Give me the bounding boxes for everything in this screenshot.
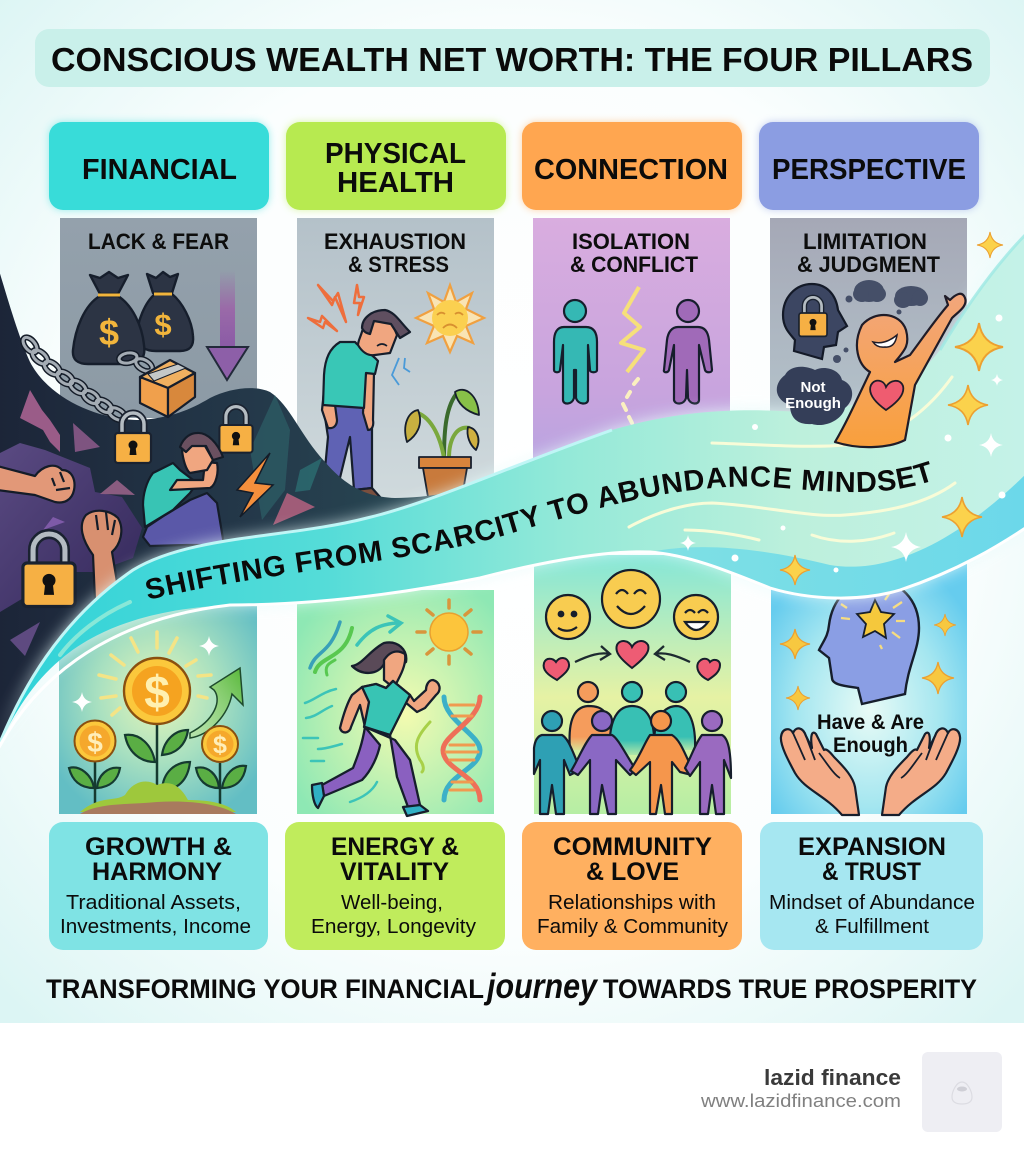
bottom card: community and love: COMMUNITY xyxy=(553,833,712,861)
icon: chains xyxy=(20,335,154,423)
bottom panel: expansion and trust xyxy=(771,555,967,815)
bottom card: growth and harmony: HARMONY xyxy=(92,858,222,886)
icon: small coin left xyxy=(74,720,116,762)
bottom card: growth and harmony: GROWTH & xyxy=(85,833,232,861)
header: financial: FINANCIAL xyxy=(82,154,237,186)
bottom card: energy and vitality: ENERGY & xyxy=(331,833,459,861)
icon: small coin left: $ xyxy=(87,727,103,758)
tagline: journey xyxy=(484,967,598,1006)
bottom card: growth and harmony: Investments, Income xyxy=(60,916,251,938)
figure: reaching person xyxy=(835,294,966,447)
footer: logo placeholder xyxy=(922,1052,1002,1132)
icon: purple person xyxy=(664,300,712,404)
footer: brand text: lazid finance xyxy=(764,1065,901,1090)
bottom card: community and love: & LOVE xyxy=(586,858,679,886)
arrow: falling xyxy=(207,270,248,380)
ribbon: scarcity to abundance xyxy=(0,230,1024,755)
bottom card: energy and vitality: Energy, Longevity xyxy=(311,916,476,938)
bottom card: growth and harmony xyxy=(49,822,268,950)
icon: thought clouds xyxy=(833,280,928,363)
panel: exhaustion and stress: EXHAUSTION xyxy=(324,229,466,254)
icon: sparkle stars xyxy=(680,232,1006,585)
icon: crouching man xyxy=(143,433,224,546)
footer: brand text xyxy=(700,1065,901,1111)
rocks xyxy=(0,443,142,612)
icon: money plants xyxy=(69,725,246,814)
icon: wilted plant xyxy=(405,390,479,497)
rock shards xyxy=(10,423,315,656)
icon: cardboard box xyxy=(140,360,195,417)
panel: exhaustion and stress: & STRESS xyxy=(348,252,449,277)
icon: sun xyxy=(417,600,481,664)
text: have and are enough xyxy=(817,711,924,757)
icon: community group xyxy=(534,682,731,814)
icon: hearts and arrows xyxy=(544,641,720,680)
bottom card: expansion and trust: EXPANSION xyxy=(798,833,946,861)
icon: sad sun xyxy=(416,285,484,352)
bottom card: community and love: Relationships with xyxy=(548,892,716,914)
icon: teal person xyxy=(554,300,597,404)
icon: money bags xyxy=(73,272,193,364)
icon: money bags: $ xyxy=(154,307,172,342)
icon: dna helix xyxy=(443,697,480,800)
bottom card: expansion and trust xyxy=(760,822,983,950)
header: physical health xyxy=(286,122,506,210)
icon: stress bolts xyxy=(308,285,364,331)
bottom card: community and love xyxy=(522,822,742,950)
bottom panel: energy and vitality xyxy=(297,590,494,816)
tagline: TOWARDS TRUE PROSPERITY xyxy=(603,974,977,1004)
panel: isolation and conflict: ISOLATION xyxy=(572,229,690,254)
header: connection xyxy=(522,122,742,210)
title: CONSCIOUS WEALTH NET WORTH: THE FOUR PILLARS xyxy=(51,41,973,78)
header: financial xyxy=(49,122,269,210)
panel: limitation and judgment: & JUDGMENT xyxy=(797,252,941,277)
icon: padlocks xyxy=(23,407,253,606)
panel: lack and fear xyxy=(60,218,257,418)
panel: exhaustion and stress xyxy=(297,218,494,503)
icon: large coin: $ xyxy=(144,666,170,718)
footer band xyxy=(0,1023,1024,1154)
scarcity landscape xyxy=(0,267,520,745)
header: physical health: PHYSICAL xyxy=(325,138,466,170)
bottom panel: community and love xyxy=(534,555,731,814)
lower band xyxy=(650,470,1024,598)
icon: lightning rift xyxy=(621,287,644,372)
ribbon edge lines xyxy=(0,430,612,755)
bottom card: expansion and trust: Mindset of Abundance xyxy=(769,892,975,914)
panel: isolation and conflict xyxy=(533,218,730,508)
title xyxy=(35,29,990,87)
icon: small coin right xyxy=(202,726,238,762)
bottom panel: financial growth xyxy=(59,600,257,814)
bottom card: expansion and trust: & Fulfillment xyxy=(815,916,929,938)
crack xyxy=(20,390,60,452)
icon: locked head xyxy=(783,284,847,359)
header glow xyxy=(49,122,979,210)
header: connection: CONNECTION xyxy=(534,154,728,186)
icon: small coin right: $ xyxy=(213,731,227,759)
icon: orange bolt xyxy=(237,453,273,517)
cloud: not enough: Not xyxy=(800,379,826,396)
bottom card: energy and vitality: Well-being, xyxy=(341,892,443,914)
text: ribbon caption: SHIFTING FROM SCARCITY TO ABUNDANCE MINDSET xyxy=(146,461,930,598)
panel: limitation and judgment: LIMITATION xyxy=(803,229,927,254)
icon: runner xyxy=(312,642,440,816)
cloud: not enough: Enough xyxy=(785,395,841,412)
bottom card: growth and harmony: Traditional Assets, xyxy=(66,892,241,914)
icon: head with star xyxy=(819,580,919,704)
footer: brand text: www.lazidfinance.com xyxy=(700,1091,901,1111)
icon: motion arrow and swooshes xyxy=(303,616,430,802)
bottom card: energy and vitality xyxy=(285,822,505,950)
header: perspective: PERSPECTIVE xyxy=(772,154,966,186)
cloud: not enough xyxy=(777,367,852,425)
icon: fist left xyxy=(0,466,74,502)
header: perspective xyxy=(759,122,979,210)
text: have and are enough: Enough xyxy=(833,734,908,757)
bottom card: energy and vitality: VITALITY xyxy=(340,858,449,886)
arrow: growth xyxy=(190,668,243,738)
tagline: TRANSFORMING YOUR FINANCIAL xyxy=(46,974,484,1004)
bottom card: expansion and trust: & TRUST xyxy=(822,858,921,886)
icon: breath marks xyxy=(392,358,410,385)
icon: large coin xyxy=(124,658,190,724)
icon: smiling faces xyxy=(546,570,718,639)
panel: limitation and judgment xyxy=(770,218,967,423)
ribbon light swooshes xyxy=(60,377,955,655)
icon: gold stars xyxy=(780,614,956,710)
pillar headers xyxy=(49,122,979,210)
icon: open hands xyxy=(781,728,960,815)
tagline xyxy=(46,967,977,1006)
icon: rift dashes xyxy=(623,379,638,423)
text: have and are enough: Have & Are xyxy=(817,711,924,734)
panel: isolation and conflict: & CONFLICT xyxy=(570,252,699,277)
icon: fist lower xyxy=(82,511,121,600)
bottom card: community and love: Family & Community xyxy=(537,916,728,938)
icon: coin rays xyxy=(99,632,211,715)
icon: sparkles xyxy=(72,636,219,712)
panel: lack and fear: LACK & FEAR xyxy=(88,229,229,254)
icon: money bags: $ xyxy=(99,312,119,353)
header: physical health: HEALTH xyxy=(337,167,454,199)
icon: exhausted man xyxy=(322,310,410,500)
